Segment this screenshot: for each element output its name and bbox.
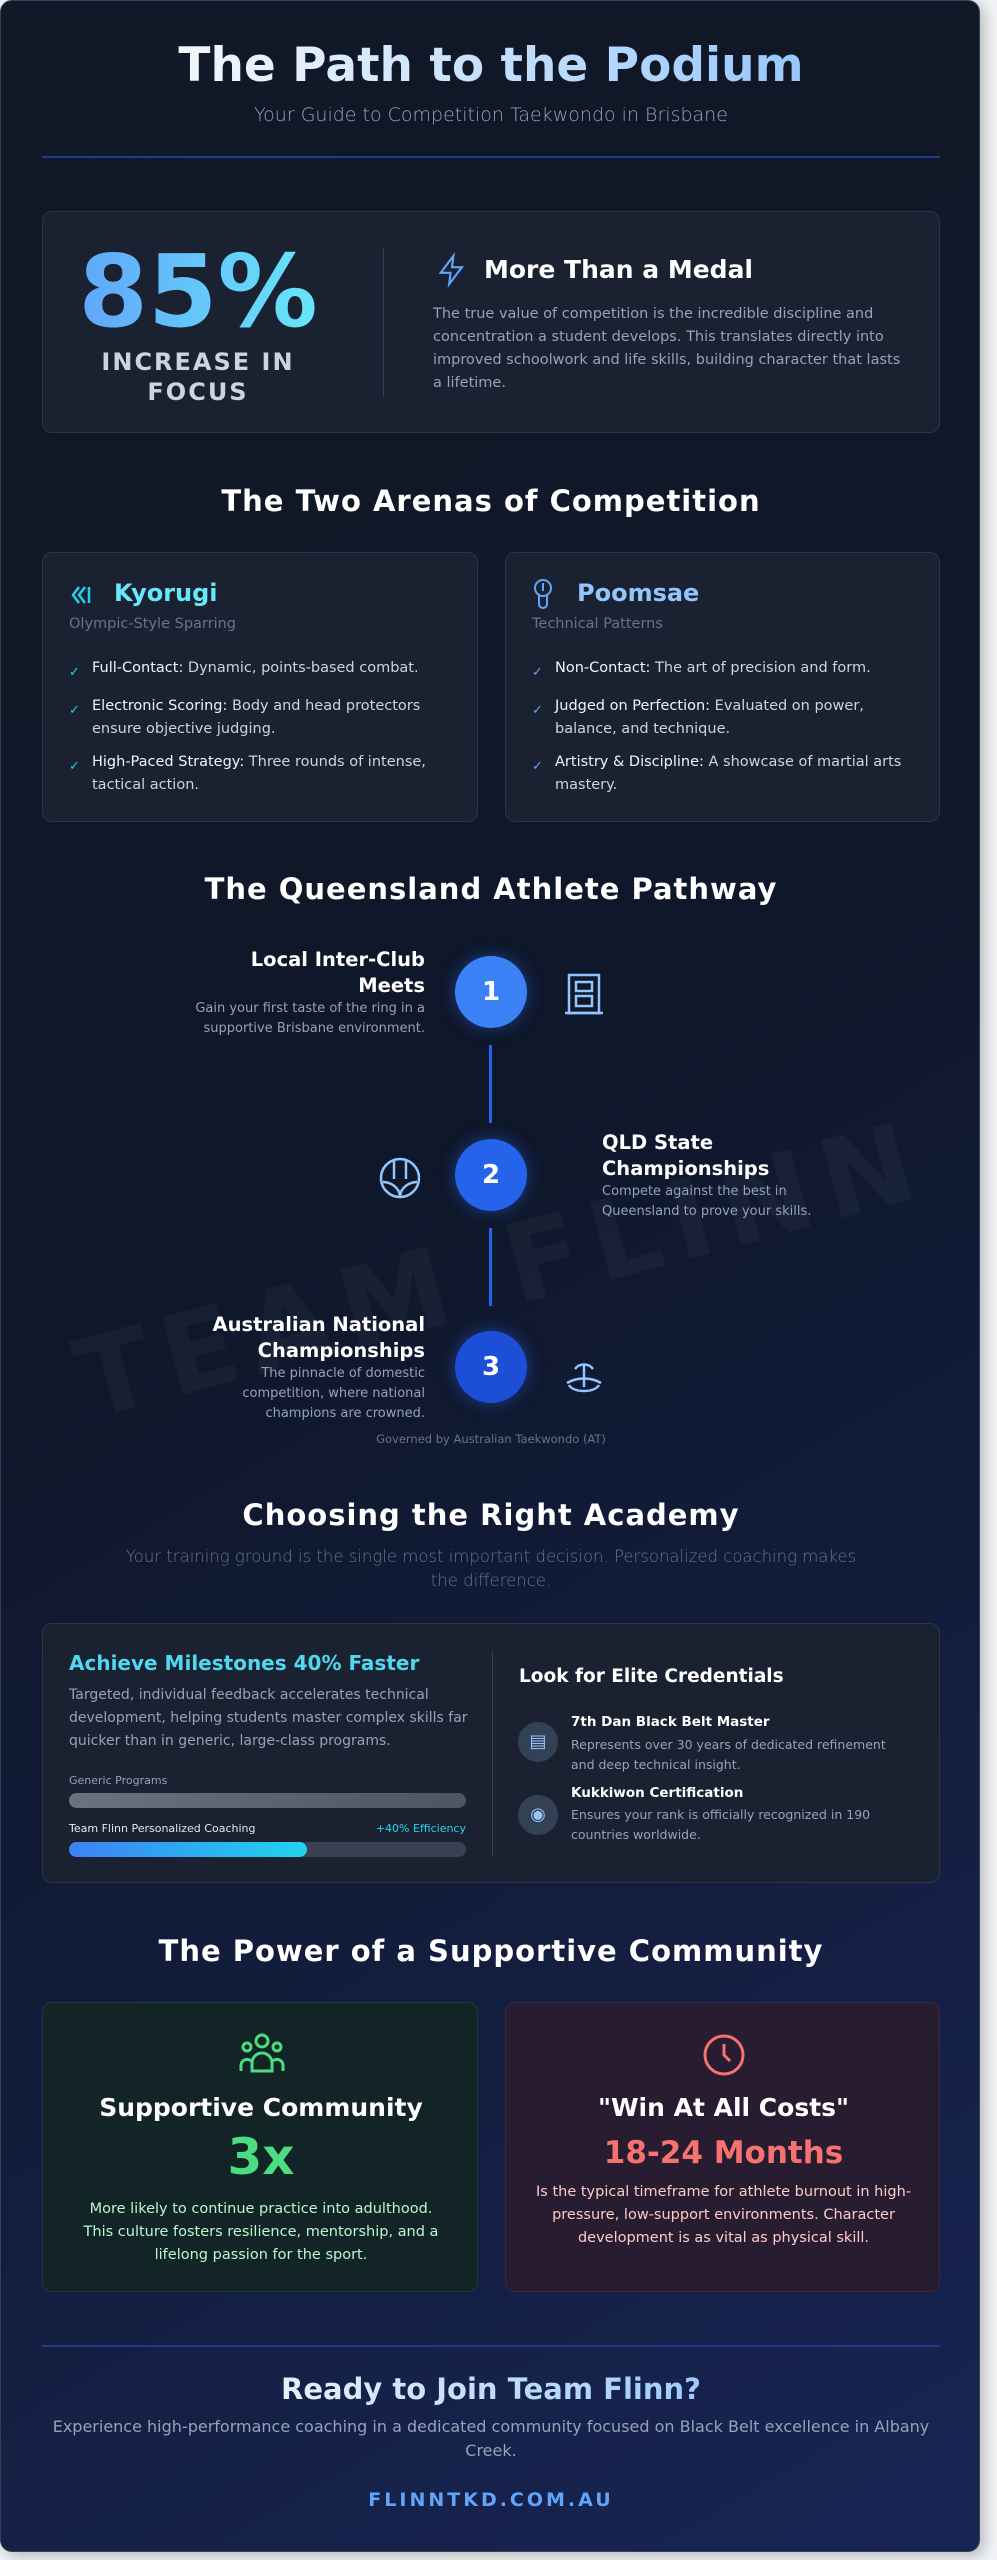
step 2: QLD State: [602, 1131, 713, 1154]
step 1: 1: [482, 977, 500, 1007]
icon: building: [565, 974, 603, 1014]
list: ✓: [69, 703, 80, 718]
icon: island: [566, 1363, 602, 1392]
list: Electronic Scoring: Body and head protectors ensure objective judging.: [92, 698, 420, 737]
panel: win at all costs: Is the typical timeframe for athlete burnout in high-pressure, low-support environments. Character development is as vital as physical skill.: [536, 2184, 911, 2246]
step 2: Compete against the best in Queensland to prove your skills.: [602, 1184, 811, 1219]
heading: two arenas: The Two Arenas of Competition: [221, 484, 761, 518]
heading: pathway: The Queensland Athlete Pathway: [205, 872, 777, 906]
panel: kyorugi: [42, 552, 478, 822]
heading: academy: Choosing the Right Academy: [242, 1498, 740, 1532]
bar chart: Generic Programs: [69, 1774, 167, 1787]
footnote: Governed by Australian Taekwondo (AT): [376, 1432, 606, 1446]
icon: clock: [704, 2034, 744, 2076]
list: ✓: [69, 665, 80, 680]
stat label: [101, 348, 295, 406]
list: Non-Contact: The art of precision and form.: [555, 660, 871, 676]
subtitle: Olympic-Style Sparring: [69, 616, 236, 632]
list: Judged on Perfection: Evaluated on power, balance, and technique.: [555, 698, 864, 737]
credential 1: Represents over 30 years of dedicated refinement and deep technical insight.: [571, 1737, 886, 1772]
step 1: Gain your first taste of the ring in a supportive Brisbane environment.: [195, 1001, 425, 1036]
list: ✓: [69, 759, 80, 774]
step 3: Championships: [258, 1339, 425, 1362]
panel: supportive: Supportive Community: [99, 2093, 423, 2122]
step 2: Championships: [602, 1157, 769, 1180]
heading: poomsae: Poomsae: [577, 579, 699, 607]
stat label: FOCUS: [147, 378, 249, 406]
panel: supportive: 3x: [227, 2128, 295, 2186]
list: [69, 660, 426, 793]
icon: kyorugi: [72, 586, 90, 604]
credential 1: ▤: [529, 1731, 546, 1752]
panel: win at all costs: 18-24 Months: [604, 2135, 843, 2171]
stat label: INCREASE IN: [101, 348, 295, 376]
icon: poomsae: [534, 579, 552, 609]
step 1: Meets: [358, 974, 425, 997]
step 1: [195, 946, 603, 1038]
icon: people: [240, 2034, 284, 2072]
subtitle: Technical Patterns: [532, 616, 663, 632]
step 3: The pinnacle of domestic competition, where national champions are crowned.: [242, 1366, 425, 1421]
list: High-Paced Strategy: Three rounds of intense, tactical action.: [92, 754, 426, 793]
icon: shield: [380, 1158, 420, 1198]
step 2: 2: [482, 1160, 500, 1190]
panel: poomsae: [505, 552, 940, 822]
text: milestones: Targeted, individual feedback accelerates technical development, helping students master complex skills far quicker than in generic, large-class programs.: [69, 1687, 468, 1749]
heading: credentials: Look for Elite Credentials: [519, 1666, 784, 1687]
text: academy intro: Your training ground is the single most important decision. Personalized coaching makes the difference.: [126, 1547, 856, 1590]
step 3: 3: [482, 1352, 500, 1382]
stat 85%: 85%: [78, 233, 318, 350]
heading: more than a medal: More Than a Medal: [484, 255, 753, 284]
credential 2: [518, 1785, 870, 1842]
list: ✓: [532, 703, 543, 718]
bar chart: Team Flinn Personalized Coaching: [69, 1822, 255, 1835]
panel: academy: [42, 1623, 940, 1883]
credential 2: Ensures your rank is officially recognized in 190 countries worldwide.: [571, 1807, 870, 1842]
credential 2: ◉: [530, 1804, 546, 1825]
heading: milestones: Achieve Milestones 40% Faster: [69, 1651, 419, 1675]
panel: supportive: More likely to continue practice into adulthood. This culture fosters resilience, mentorship, and a lifelong passion for the sport.: [84, 2201, 438, 2263]
bar chart: +40% Efficiency: [376, 1822, 466, 1835]
list: Artistry & Discipline: A showcase of martial arts mastery.: [555, 754, 901, 793]
panel: win at all costs: [505, 2002, 940, 2292]
subtitle: Your Guide to Competition Taekwondo in Brisbane: [254, 104, 728, 126]
list: Full-Contact: Dynamic, points-based combat.: [92, 660, 419, 676]
link: FLINNTKD.COM.AU: [368, 2489, 614, 2511]
text: medal description: The true value of competition is the incredible discipline and concentration a student develops. This translates directly into improved schoolwork and life skills, building character that lasts a lifetime.: [433, 306, 900, 391]
panel: stat card: [42, 211, 940, 433]
credential 2: Kukkiwon Certification: [571, 1785, 743, 1801]
step 2: [380, 1130, 811, 1220]
step 3: Australian National: [213, 1313, 425, 1336]
step 3: [212, 1313, 602, 1421]
heading: kyorugi: Kyorugi: [114, 579, 218, 607]
credential 1: 7th Dan Black Belt Master: [571, 1714, 770, 1730]
step 1: Local Inter-Club: [251, 948, 425, 971]
bar chart: [68, 1774, 466, 1857]
text: cta: Experience high-performance coaching in a dedicated community focused on Black Belt excellence in Albany Creek.: [53, 2417, 929, 2460]
list: [532, 660, 901, 793]
credential 1: [518, 1714, 886, 1772]
heading: community: The Power of a Supportive Community: [159, 1934, 823, 1968]
watermark: TEAM FLINN: [63, 1095, 939, 1445]
panel: supportive: [42, 2002, 478, 2292]
list: ✓: [532, 665, 543, 680]
list: ✓: [532, 759, 543, 774]
panel: win at all costs: "Win At All Costs": [598, 2093, 849, 2122]
heading: cta: Ready to Join Team Flinn?: [281, 2372, 701, 2406]
icon: lightning: [438, 252, 464, 288]
title: The Path to the Podium: [178, 38, 804, 93]
